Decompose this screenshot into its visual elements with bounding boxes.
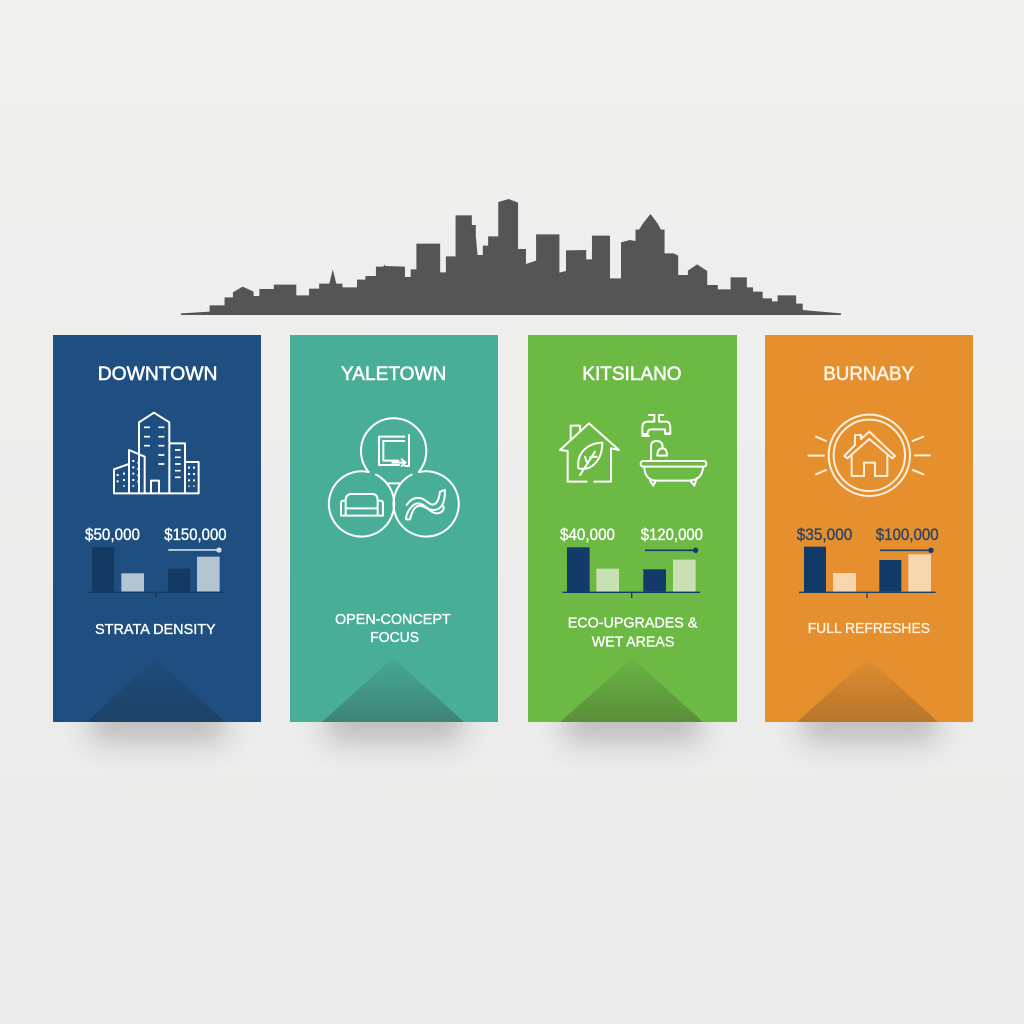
- value: high: $120,000: [641, 526, 703, 544]
- panel: Kitsilano: [528, 335, 737, 742]
- caption line 2: WET AREAS: [592, 634, 674, 651]
- icon: eco house: [560, 423, 619, 482]
- panel: Yaletown: [290, 335, 498, 742]
- heading: Kitsilano: KITSILANO: [582, 363, 682, 385]
- chart: Kitsilano cost range: [562, 547, 700, 598]
- city skyline silhouette: [181, 199, 841, 315]
- value: low: $50,000: [85, 526, 140, 544]
- value: low: $35,000: [797, 526, 852, 544]
- chart: Downtown cost range: [87, 547, 223, 597]
- heading: Downtown: DOWNTOWN: [98, 363, 217, 385]
- caption line 1: OPEN-CONCEPT: [335, 611, 451, 628]
- heading: Burnaby: BURNABY: [823, 363, 914, 385]
- caption line 1: ECO-UPGRADES &: [568, 615, 697, 632]
- caption: FULL REFRESHES: [808, 620, 930, 637]
- panel: Downtown: [53, 335, 261, 742]
- value: high: $100,000: [876, 526, 939, 544]
- panel: Burnaby: [765, 335, 973, 742]
- caption: STRATA DENSITY: [95, 621, 216, 638]
- icon: three circles with floor plan, sofa and wave: [329, 418, 459, 537]
- chart: Burnaby cost range: [799, 547, 936, 598]
- icon: glowing house: [808, 415, 930, 496]
- caption line 2: FOCUS: [370, 629, 419, 646]
- icon: city buildings: [114, 413, 199, 493]
- value: high: $150,000: [164, 526, 227, 544]
- heading: Yaletown: YALETOWN: [341, 363, 446, 385]
- value: low: $40,000: [560, 526, 615, 544]
- icon: faucet and bathtub: [641, 415, 706, 486]
